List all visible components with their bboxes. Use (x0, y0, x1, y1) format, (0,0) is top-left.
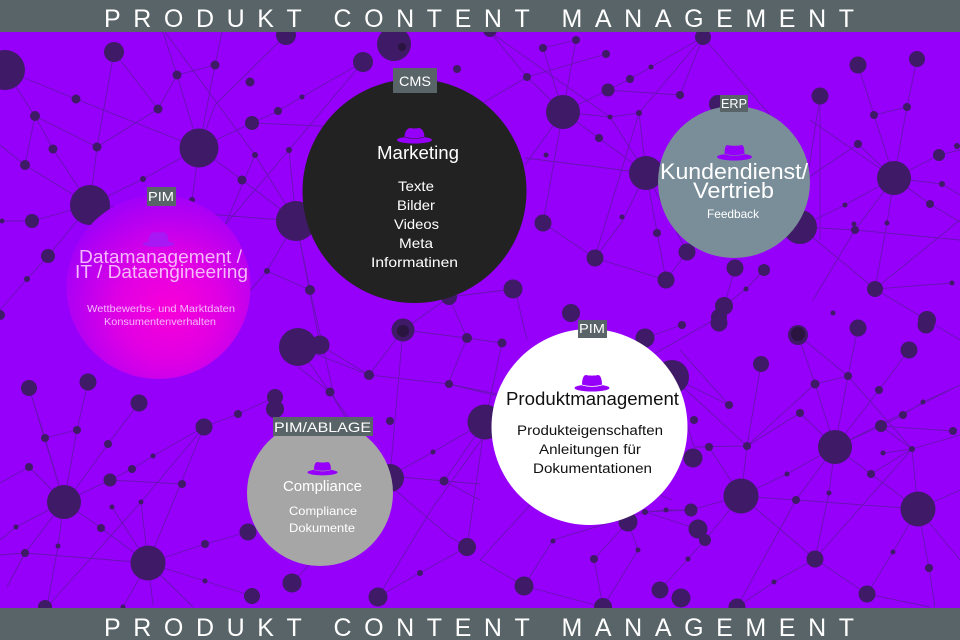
icon: Compliance hat (307, 462, 338, 475)
text block: Produktmanagement items (517, 423, 663, 476)
heading: Marketing: Marketing (377, 143, 459, 163)
panel: Produktmanagement (492, 320, 688, 525)
text block: Datamanagement items: Wettbewerbs- und Marktdaten (87, 304, 235, 315)
icon: Marketing hat (397, 128, 432, 144)
text block: Marketing items: Bilder (397, 197, 435, 213)
top banner: PRODUKT CONTENT MANAGEMENT (104, 5, 854, 33)
icon: Kundendienst hat (717, 145, 752, 160)
icon: Produktmanagement hat (574, 375, 610, 392)
panel: Kundendienst / Vertrieb (658, 95, 810, 258)
heading: Kundendienst / Vertrieb (660, 159, 809, 203)
tag: PIM (147, 187, 176, 206)
bottom banner (0, 608, 960, 640)
text block: Produktmanagement items: Anleitungen für (539, 442, 642, 457)
panel: Marketing (302, 68, 526, 303)
tag: PIM/ABLAGE: PIM/ABLAGE (274, 419, 371, 435)
text block: Produktmanagement items: Dokumentationen (533, 461, 652, 476)
text block: Marketing items: Meta (399, 235, 433, 251)
tag: PIM: PIM (579, 321, 605, 336)
text block: Compliance items (289, 504, 357, 535)
heading: Datamanagement (75, 247, 248, 282)
panel: Datamanagement (66, 187, 250, 379)
icon: Datamanagement hat (142, 232, 174, 247)
heading: Compliance: Compliance (283, 478, 362, 495)
text block: Marketing items (371, 178, 458, 270)
text block: Marketing items: Videos (394, 216, 439, 232)
heading: Kundendienst / Vertrieb: Kundendienst/ (660, 159, 809, 184)
heading: Datamanagement: IT / Dataengineering (75, 262, 248, 282)
text block: Datamanagement items: Konsumentenverhalten (104, 317, 216, 328)
text block: Feedback: Feedback (707, 207, 760, 221)
text block: Marketing items: Texte (398, 178, 434, 194)
text block: Compliance items: Dokumente (289, 521, 355, 535)
text block: Datamanagement items (87, 304, 235, 328)
text block: Produktmanagement items: Produkteigenschaften (517, 423, 663, 438)
heading: Produktmanagement: Produktmanagement (506, 389, 679, 409)
heading: Kundendienst / Vertrieb: Vertrieb (693, 178, 774, 203)
tag: PIM: PIM (148, 189, 174, 204)
top banner (0, 0, 960, 33)
tag: ERP: ERP (721, 96, 747, 111)
tag: CMS (393, 68, 437, 93)
tag: PIM (578, 320, 607, 338)
tag: CMS: CMS (399, 73, 431, 89)
heading: Datamanagement: Datamanagement / (79, 247, 242, 267)
panel: Compliance (247, 417, 393, 566)
text block: Marketing items: Informatinen (371, 254, 458, 270)
text block: Compliance items: Compliance (289, 504, 357, 518)
